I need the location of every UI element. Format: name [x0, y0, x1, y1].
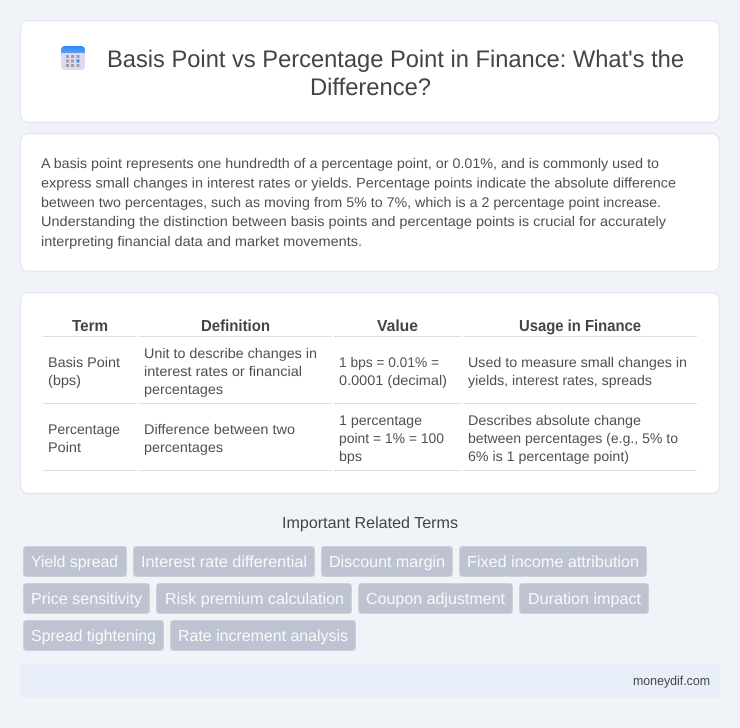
tag: fixed income attribution [460, 546, 646, 576]
table header: Term [72, 318, 108, 335]
table row: basis point [48, 345, 687, 397]
text block: description paragraph: between two percentages, such as moving from 5% to 7%, which is a 2 percentage point increase. [41, 194, 661, 210]
tag: yield spread [24, 546, 126, 576]
table row: percentage point: 1 percentage [339, 412, 422, 428]
tag: coupon adjustment [358, 584, 512, 614]
tag: coupon adjustment: Coupon adjustment [366, 591, 506, 608]
tag: duration impact: Duration impact [528, 591, 642, 608]
table row: basis point: Unit to describe changes in [144, 345, 317, 361]
title [107, 46, 684, 101]
table row: basis point: 0.0001 (decimal) [339, 372, 447, 388]
tags: related terms [24, 546, 648, 650]
heading: important related terms: Important Related Terms [282, 515, 458, 532]
footer source text: moneydif.com [633, 673, 710, 688]
text block: description paragraph: interpreting financial data and market movements. [41, 233, 362, 249]
table row: basis point: (bps) [48, 372, 81, 388]
footer band [20, 664, 720, 698]
tag: rate increment analysis [170, 620, 356, 650]
tag: price sensitivity [24, 584, 150, 614]
tag: price sensitivity: Price sensitivity [31, 591, 142, 608]
text block: description paragraph: Understanding the distinction between basis points and percentage points is crucial for accurately [41, 213, 666, 229]
table row: percentage point: between percentages (e.g., 5% to [468, 430, 678, 446]
table row: basis point: 1 bps = 0.01% = [339, 354, 439, 370]
panel: title card [20, 20, 720, 122]
tag: interest rate differential: Interest rate differential [141, 554, 307, 571]
text block: description paragraph: A basis point represents one hundredth of a percentage point, or 0.01%, and is commonly used to [41, 155, 659, 171]
tag: yield spread: Yield spread [31, 554, 118, 571]
tag: spread tightening [24, 620, 164, 650]
table row: percentage point: point = 1% = 100 [339, 430, 444, 446]
table header: Definition [201, 318, 270, 335]
tag: spread tightening: Spread tightening [31, 628, 156, 645]
table row: basis point: percentages [144, 381, 223, 397]
icon: calendar [61, 46, 85, 70]
tag: risk premium calculation: Risk premium calculation [165, 591, 344, 608]
table row: percentage point: Point [48, 439, 81, 455]
table row: basis point: Used to measure small changes in [468, 354, 687, 370]
table row: percentage point: 6% is 1 percentage point) [468, 448, 629, 464]
title: Difference? [310, 74, 431, 101]
tag: discount margin: Discount margin [329, 554, 445, 571]
table header: Value [377, 318, 418, 335]
table row: basis point: yields, interest rates, spreads [468, 372, 652, 388]
table row: percentage point [48, 412, 678, 464]
table row: basis point: Basis Point [48, 354, 120, 370]
text block: description paragraph: express small changes in interest rates or yields. Percentage points indicate the absolute difference [41, 174, 676, 190]
tag: duration impact [520, 584, 648, 614]
table header: Usage in Finance [519, 318, 641, 335]
table row: percentage point: Percentage [48, 421, 120, 437]
table row: basis point: interest rates or financial [144, 363, 302, 379]
tag: risk premium calculation [156, 584, 352, 614]
tag: fixed income attribution: Fixed income attribution [467, 554, 639, 571]
table row: percentage point: percentages [144, 439, 223, 455]
table row: percentage point: Describes absolute change [468, 412, 641, 428]
table row: percentage point: Difference between two [144, 421, 295, 437]
table header [72, 318, 641, 335]
tag: interest rate differential [134, 546, 314, 576]
tag: discount margin [322, 546, 452, 576]
text block: description paragraph [41, 155, 676, 249]
title: Basis Point vs Percentage Point in Finance: What's the [107, 46, 684, 73]
tag: rate increment analysis: Rate increment analysis [178, 628, 348, 645]
panel: comparison table [20, 292, 720, 494]
panel: description [20, 134, 720, 272]
table row: percentage point: bps [339, 448, 362, 464]
